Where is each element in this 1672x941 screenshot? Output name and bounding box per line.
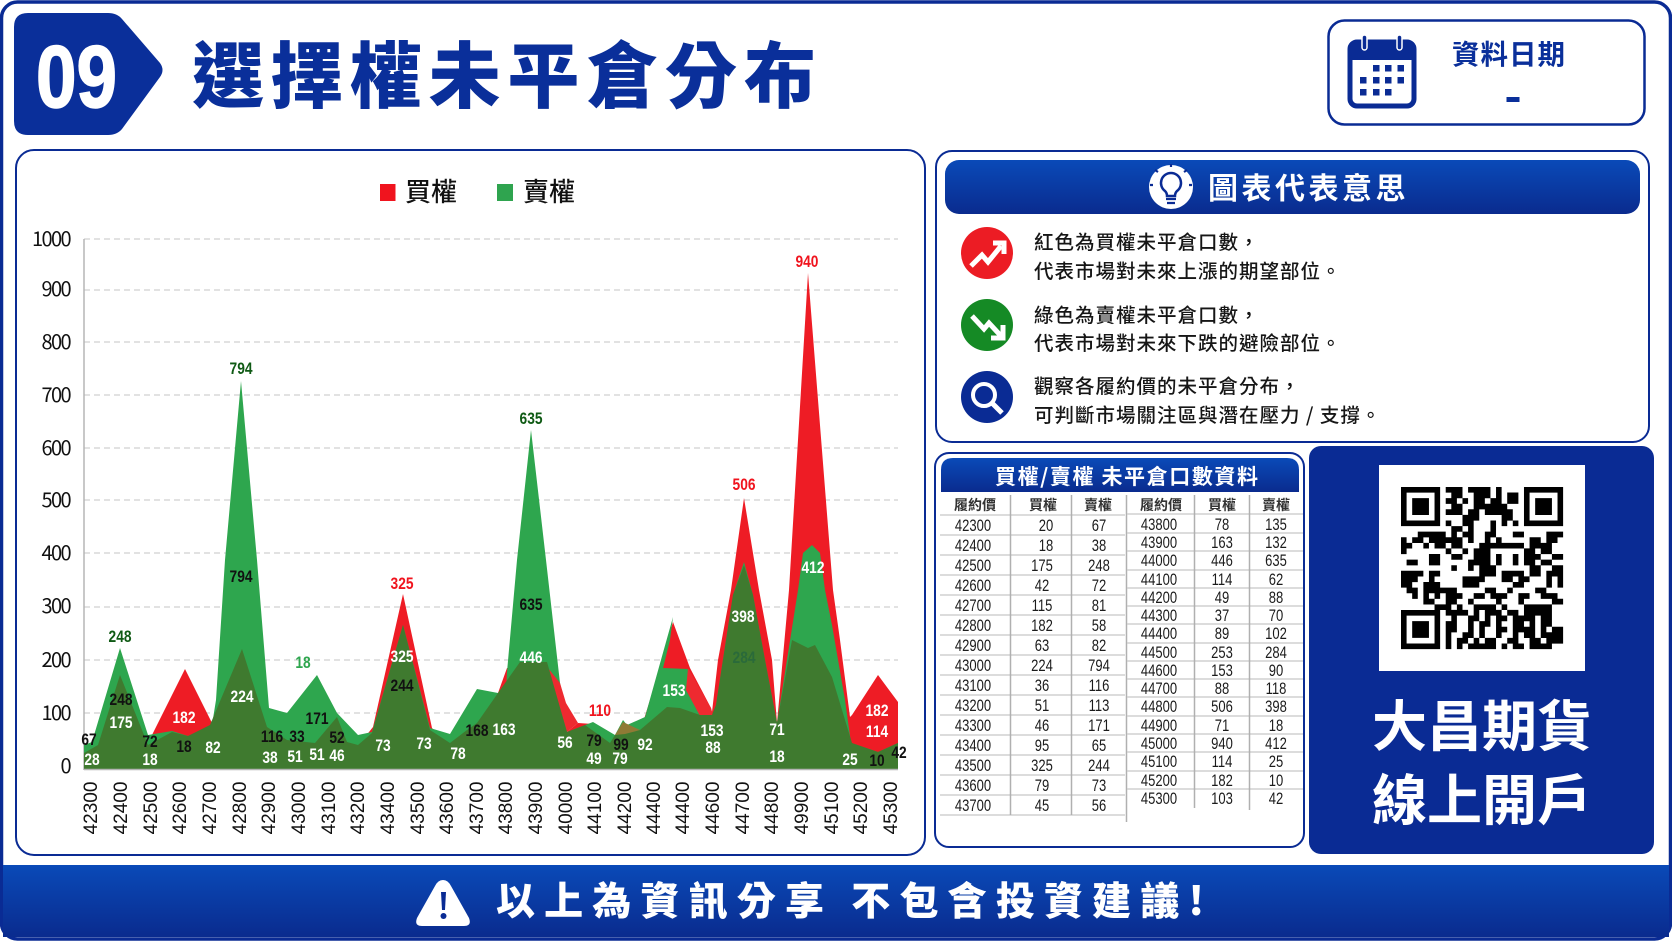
item: green meaning: 代表市場對未來下跌的避險部位。 — [1034, 327, 1342, 356]
table: right column: 45200 — [1141, 773, 1177, 790]
table: left column: 42600 — [955, 578, 991, 595]
table: left column: 42700 — [955, 598, 991, 615]
table: right column: 132 — [1265, 535, 1287, 552]
table: right column: 10 — [1269, 773, 1283, 790]
data labels — [81, 253, 907, 770]
date box — [1328, 20, 1644, 124]
x axis labels: 43200 — [348, 782, 369, 834]
table: right column: 412 — [1265, 736, 1287, 753]
x axis labels: 43700 — [467, 782, 488, 834]
icon: calendar — [1350, 35, 1414, 106]
x axis labels: 44200 — [615, 782, 636, 834]
table: left column: 63 — [1035, 638, 1049, 655]
x axis labels: 44400 — [644, 782, 665, 834]
panel heading bar: 圖表代表意思 — [1208, 164, 1409, 208]
x axis labels: 45100 — [822, 782, 843, 834]
table: left column: 43600 — [955, 778, 991, 795]
table: left column: 95 — [1035, 738, 1049, 755]
table: left column: 51 — [1035, 698, 1049, 715]
table: right column: 89 — [1215, 626, 1229, 643]
table: left column: 56 — [1092, 798, 1106, 815]
item: red meaning: 代表市場對未來上漲的期望部位。 — [1034, 255, 1342, 284]
data labels: 79 — [612, 750, 628, 768]
table: left column: 72 — [1092, 578, 1106, 595]
table: right column: 44900 — [1141, 718, 1177, 735]
x axis labels: 49900 — [792, 782, 813, 834]
table: left column: 履約價 — [954, 495, 996, 515]
number badge — [14, 13, 162, 135]
icon: light bulb — [1149, 164, 1193, 209]
table: right column: 153 — [1211, 663, 1233, 680]
table: left column: 171 — [1088, 718, 1110, 735]
icon: falling arrow — [961, 299, 1013, 351]
icon: rising arrow — [961, 227, 1013, 279]
data labels: 153 — [663, 682, 686, 700]
table: left column: 67 — [1092, 518, 1106, 535]
table: right column: 44200 — [1141, 590, 1177, 607]
table: left column: 42300 — [955, 518, 991, 535]
table: left column: 42800 — [955, 618, 991, 635]
table: left column: 18 — [1039, 538, 1053, 555]
table: right column: 635 — [1265, 553, 1287, 570]
date value — [1506, 97, 1520, 102]
table: left column — [940, 495, 1126, 822]
data labels: 248 — [110, 691, 133, 709]
data labels: 248 — [109, 628, 132, 646]
table: left column: 65 — [1092, 738, 1106, 755]
y axis and grid: 1000 — [32, 223, 72, 252]
panel: open interest chart — [16, 150, 925, 855]
table: right column: 44800 — [1141, 699, 1177, 716]
chart legend: 賣權 — [523, 172, 575, 209]
table: left column: 買權 — [1029, 495, 1057, 515]
data labels: 42 — [891, 744, 907, 762]
item: observation — [961, 370, 1381, 428]
data labels: 175 — [110, 714, 133, 732]
table: right column: 履約價 — [1140, 495, 1182, 515]
QR code — [1379, 465, 1585, 671]
data labels: 82 — [205, 739, 221, 757]
table: right column: 44500 — [1141, 645, 1177, 662]
item: observation: 觀察各履約價的未平倉分布， — [1034, 370, 1301, 399]
x axis labels: 43900 — [526, 782, 547, 834]
table: left column: 325 — [1031, 758, 1053, 775]
y axis and grid: 400 — [42, 537, 72, 566]
table: left column: 43100 — [955, 678, 991, 695]
table: right column: 88 — [1215, 681, 1229, 698]
icon: magnifier — [961, 371, 1013, 423]
item: red meaning — [961, 226, 1342, 284]
x axis labels — [81, 770, 902, 834]
data labels: 284 — [733, 649, 756, 667]
x axis labels: 40000 — [556, 782, 577, 834]
y axis and grid: 800 — [42, 326, 72, 355]
table: right column: 44400 — [1141, 626, 1177, 643]
y axis and grid: 300 — [42, 590, 72, 619]
table: left column: 45 — [1035, 798, 1049, 815]
data labels: 28 — [84, 751, 100, 769]
table: right column: 506 — [1211, 699, 1233, 716]
data labels: 794 — [230, 568, 253, 586]
chart legend — [380, 172, 575, 209]
table: right column: 45000 — [1141, 736, 1177, 753]
y axis and grid — [32, 223, 898, 779]
title: 選擇權未平倉分布 — [192, 18, 816, 123]
table: right column: 940 — [1211, 736, 1233, 753]
date label: 資料日期 — [1452, 32, 1566, 72]
x axis labels: 42800 — [230, 782, 251, 834]
data labels: 171 — [306, 710, 329, 728]
y axis and grid: 900 — [42, 273, 72, 302]
chart legend: 買權 — [405, 172, 457, 209]
table: left column: 224 — [1031, 658, 1053, 675]
table: right column: 70 — [1269, 608, 1283, 625]
QR caption — [1372, 682, 1592, 836]
table: right column: 44600 — [1141, 663, 1177, 680]
table: right column: 42 — [1269, 791, 1283, 808]
table: right column: 71 — [1215, 718, 1229, 735]
data labels: 72 — [142, 733, 158, 751]
data labels: 940 — [796, 253, 818, 271]
table: left column: 36 — [1035, 678, 1049, 695]
item: green meaning: 綠色為賣權未平倉口數， — [1034, 299, 1260, 328]
table: right column: 44700 — [1141, 681, 1177, 698]
data labels: 18 — [769, 748, 785, 766]
table: left column: 81 — [1092, 598, 1106, 615]
table: right column: 118 — [1266, 681, 1286, 698]
data labels: 18 — [142, 751, 158, 769]
data labels: 398 — [732, 608, 755, 626]
table: left column: 244 — [1088, 758, 1110, 775]
table: right column: 182 — [1211, 773, 1233, 790]
table: left column: 248 — [1088, 558, 1110, 575]
table: right column: 43800 — [1141, 517, 1177, 534]
footer disclaimer — [3, 865, 1669, 937]
data labels: 794 — [230, 360, 253, 378]
data labels: 153 — [701, 722, 724, 740]
table: left column: 42500 — [955, 558, 991, 575]
table: left column: 43000 — [955, 658, 991, 675]
x axis labels: 43400 — [378, 782, 399, 834]
data labels: 52 — [329, 729, 345, 747]
table: right column: 88 — [1269, 590, 1283, 607]
table: left column: 賣權 — [1084, 495, 1112, 515]
panel: open interest table — [935, 453, 1304, 847]
y axis and grid: 500 — [42, 484, 72, 513]
data labels: 56 — [557, 734, 573, 752]
table: right column: 135 — [1265, 517, 1287, 534]
icon: warning triangle — [416, 880, 470, 926]
item: observation: 可判斷市場關注區與潛在壓力 / 支撐。 — [1034, 399, 1381, 428]
table heading: 買權/賣權 未平倉口數資料 — [995, 461, 1258, 491]
y axis and grid: 0 — [60, 750, 72, 779]
table: left column: 46 — [1035, 718, 1049, 735]
table: right column: 114 — [1212, 572, 1232, 589]
table: right column: 446 — [1211, 553, 1233, 570]
table: right column: 284 — [1265, 645, 1287, 662]
x axis labels: 42600 — [170, 782, 191, 834]
table: right column: 25 — [1269, 754, 1283, 771]
table: left column: 182 — [1031, 618, 1053, 635]
item: red meaning: 紅色為買權未平倉口數， — [1034, 226, 1260, 255]
table: left column: 43500 — [955, 758, 991, 775]
table: left column: 73 — [1092, 778, 1106, 795]
x axis labels: 43000 — [289, 782, 310, 834]
table: right column: 45300 — [1141, 791, 1177, 808]
x axis labels: 43600 — [437, 782, 458, 834]
data labels: 73 — [375, 737, 391, 755]
data labels: 67 — [81, 731, 97, 749]
data labels: 78 — [450, 745, 466, 763]
data labels: 46 — [329, 747, 345, 765]
data labels: 88 — [705, 739, 721, 757]
data labels: 182 — [173, 709, 195, 727]
x axis labels: 44700 — [733, 782, 754, 834]
area: put open interest — [84, 381, 898, 769]
x axis labels: 42300 — [81, 782, 102, 834]
panel: chart meaning — [936, 151, 1649, 442]
data labels: 114 — [866, 723, 888, 741]
x axis labels: 42700 — [200, 782, 221, 834]
table heading — [941, 458, 1299, 492]
x axis labels: 42500 — [141, 782, 162, 834]
table: right column: 49 — [1215, 590, 1229, 607]
table: right column: 37 — [1215, 608, 1229, 625]
table: left column: 43700 — [955, 798, 991, 815]
data labels: 51 — [309, 746, 325, 764]
table: left column: 43200 — [955, 698, 991, 715]
QR caption: 大昌期貨 — [1372, 682, 1592, 762]
table: left column: 82 — [1092, 638, 1106, 655]
table: left column: 42 — [1035, 578, 1049, 595]
area: call slivers above puts — [548, 668, 713, 732]
table: right column: 44100 — [1141, 572, 1177, 589]
table: left column: 20 — [1039, 518, 1053, 535]
table: right column: 44000 — [1141, 553, 1177, 570]
x axis labels: 45300 — [881, 782, 902, 834]
table: left column: 794 — [1088, 658, 1110, 675]
data labels: 92 — [637, 736, 653, 754]
y axis and grid: 200 — [42, 644, 72, 673]
data labels: 10 — [869, 752, 885, 770]
table: left column: 43300 — [955, 718, 991, 735]
data labels: 116 — [261, 728, 283, 746]
table: right column — [1127, 495, 1303, 810]
table: right column: 45100 — [1141, 754, 1177, 771]
data labels: 18 — [176, 738, 192, 756]
x axis labels: 44600 — [703, 782, 724, 834]
x axis labels: 42400 — [111, 782, 132, 834]
table: right column: 78 — [1215, 517, 1229, 534]
data labels: 168 — [466, 722, 489, 740]
data labels: 79 — [586, 732, 602, 750]
data labels: 635 — [520, 596, 543, 614]
data labels: 325 — [391, 648, 414, 666]
data labels: 244 — [391, 677, 414, 695]
data labels: 110 — [589, 702, 611, 720]
table: left column: 42400 — [955, 538, 991, 555]
data labels: 25 — [842, 751, 858, 769]
table: left column: 43400 — [955, 738, 991, 755]
y axis and grid: 600 — [42, 432, 72, 461]
area: overlap of calls and puts — [84, 565, 898, 769]
table: right column: 114 — [1212, 754, 1232, 771]
table: left column: 113 — [1089, 698, 1109, 715]
table: left column: 42900 — [955, 638, 991, 655]
table: right column: 90 — [1269, 663, 1283, 680]
data labels: 71 — [769, 721, 785, 739]
table: right column: 163 — [1211, 535, 1233, 552]
data labels: 33 — [289, 728, 305, 746]
data labels: 18 — [295, 654, 311, 672]
panel heading bar — [945, 160, 1640, 214]
x axis labels: 44100 — [585, 782, 606, 834]
x axis labels: 45200 — [851, 782, 872, 834]
x axis labels: 43100 — [319, 782, 340, 834]
x axis labels: 44800 — [762, 782, 783, 834]
data labels: 51 — [287, 748, 303, 766]
table: right column: 103 — [1211, 791, 1233, 808]
table: left column: 175 — [1031, 558, 1053, 575]
data labels: 99 — [613, 736, 629, 754]
x axis labels: 42900 — [259, 782, 280, 834]
panel: QR code call to action — [1309, 446, 1654, 854]
footer disclaimer: 以上為資訊分享 不包含投資建議! — [496, 871, 1204, 927]
data labels: 635 — [520, 410, 543, 428]
x axis labels: 43500 — [408, 782, 429, 834]
data labels: 73 — [416, 735, 432, 753]
table: right column: 買權 — [1208, 495, 1236, 515]
area: call open interest — [152, 273, 898, 769]
y axis and grid: 100 — [42, 697, 72, 726]
x axis labels: 44400 — [673, 782, 694, 834]
data labels: 38 — [262, 749, 278, 767]
table: left column: 58 — [1092, 618, 1106, 635]
data labels: 182 — [866, 702, 888, 720]
x axis labels: 43800 — [496, 782, 517, 834]
data labels: 163 — [493, 721, 516, 739]
table: right column: 44300 — [1141, 608, 1177, 625]
table: left column: 79 — [1035, 778, 1049, 795]
area: brown overlap patch — [615, 722, 640, 735]
table: right column: 賣權 — [1262, 495, 1290, 515]
number badge: 09 — [36, 27, 117, 126]
table: right column: 102 — [1265, 626, 1287, 643]
item: green meaning — [961, 299, 1342, 356]
table: right column: 398 — [1265, 699, 1287, 716]
data labels: 446 — [520, 649, 543, 667]
data labels: 224 — [231, 688, 254, 706]
table: left column: 38 — [1092, 538, 1106, 555]
y axis and grid: 700 — [42, 379, 72, 408]
data labels: 49 — [586, 750, 602, 768]
data labels: 506 — [733, 476, 756, 494]
QR caption: 線上開戶 — [1372, 756, 1592, 836]
data labels: 412 — [802, 559, 824, 577]
table: left column: 116 — [1089, 678, 1109, 695]
data labels: 325 — [391, 575, 414, 593]
table: right column: 43900 — [1141, 535, 1177, 552]
table: right column: 62 — [1269, 572, 1283, 589]
table: right column: 253 — [1211, 645, 1233, 662]
table: left column: 115 — [1032, 598, 1052, 615]
table: right column: 18 — [1269, 718, 1283, 735]
